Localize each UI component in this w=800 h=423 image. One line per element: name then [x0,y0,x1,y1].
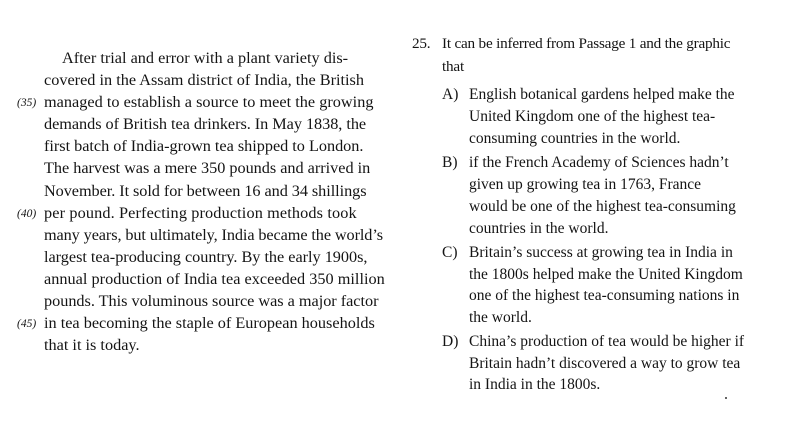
answer choice A: A) [442,86,458,103]
answer choice D: China’s production of tea would be higher if [469,333,744,350]
passage text block: (45) [17,318,36,330]
answer choice A: English botanical gardens helped make the [469,86,735,103]
answer choice A [442,86,735,147]
passage text block: that it is today. [44,336,140,354]
answer choice B: if the French Academy of Sciences hadn’t [469,154,729,171]
answer choice C [442,244,743,326]
passage text block: (40) [17,208,36,220]
question 25 stem: It can be inferred from Passage 1 and the graphic [442,35,730,52]
passage text block [17,49,385,354]
passage text block: annual production of India tea exceeded 350 million [44,270,385,288]
answer choice B: countries in the world. [469,220,608,236]
passage text block: pounds. This voluminous source was a major factor [44,292,378,310]
question 25 stem [412,35,730,75]
answer choice B: would be one of the highest tea-consuming [469,198,736,214]
answer choice B: given up growing tea in 1763, France [469,176,701,193]
answer choice D: in India in the 1800s. [469,376,600,393]
passage text block: After trial and error with a plant variety dis- [62,49,348,67]
answer choice B: B) [442,154,458,171]
passage text block: demands of British tea drinkers. In May 1838, the [44,115,366,133]
question 25 stem: 25. [412,35,430,52]
answer choice D: Britain hadn’t discovered a way to grow tea [469,354,740,372]
passage text block: many years, but ultimately, India became the world’s [44,226,383,244]
passage text block: in tea becoming the staple of European households [44,314,375,332]
answer choice D [442,333,744,393]
passage text block: per pound. Perfecting production methods took [44,204,357,222]
passage text block: largest tea-producing country. By the early 1900s, [44,248,367,266]
answer choice A: consuming countries in the world. [469,130,680,147]
answer choice A: United Kingdom one of the highest tea- [469,108,715,125]
answer choice C: C) [442,244,458,261]
passage text block: first batch of India-grown tea shipped to London. [44,137,363,155]
stray print dot [725,397,727,399]
answer choice C: the world. [469,308,532,326]
passage text block: managed to establish a source to meet the growing [44,93,374,111]
answer choice D: D) [442,333,458,350]
answer choice B [442,154,736,236]
passage text block: November. It sold for between 16 and 34 shillings [44,182,366,200]
passage text block: The harvest was a mere 350 pounds and arrived in [44,159,370,177]
answer choice C: one of the highest tea-consuming nations in [469,287,739,304]
answer choice C: Britain’s success at growing tea in India in [469,244,733,261]
passage text block: (35) [17,97,36,109]
answer choice C: the 1800s helped make the United Kingdom [469,266,743,282]
passage text block: covered in the Assam district of India, the British [44,71,364,89]
question 25 stem: that [442,58,464,75]
